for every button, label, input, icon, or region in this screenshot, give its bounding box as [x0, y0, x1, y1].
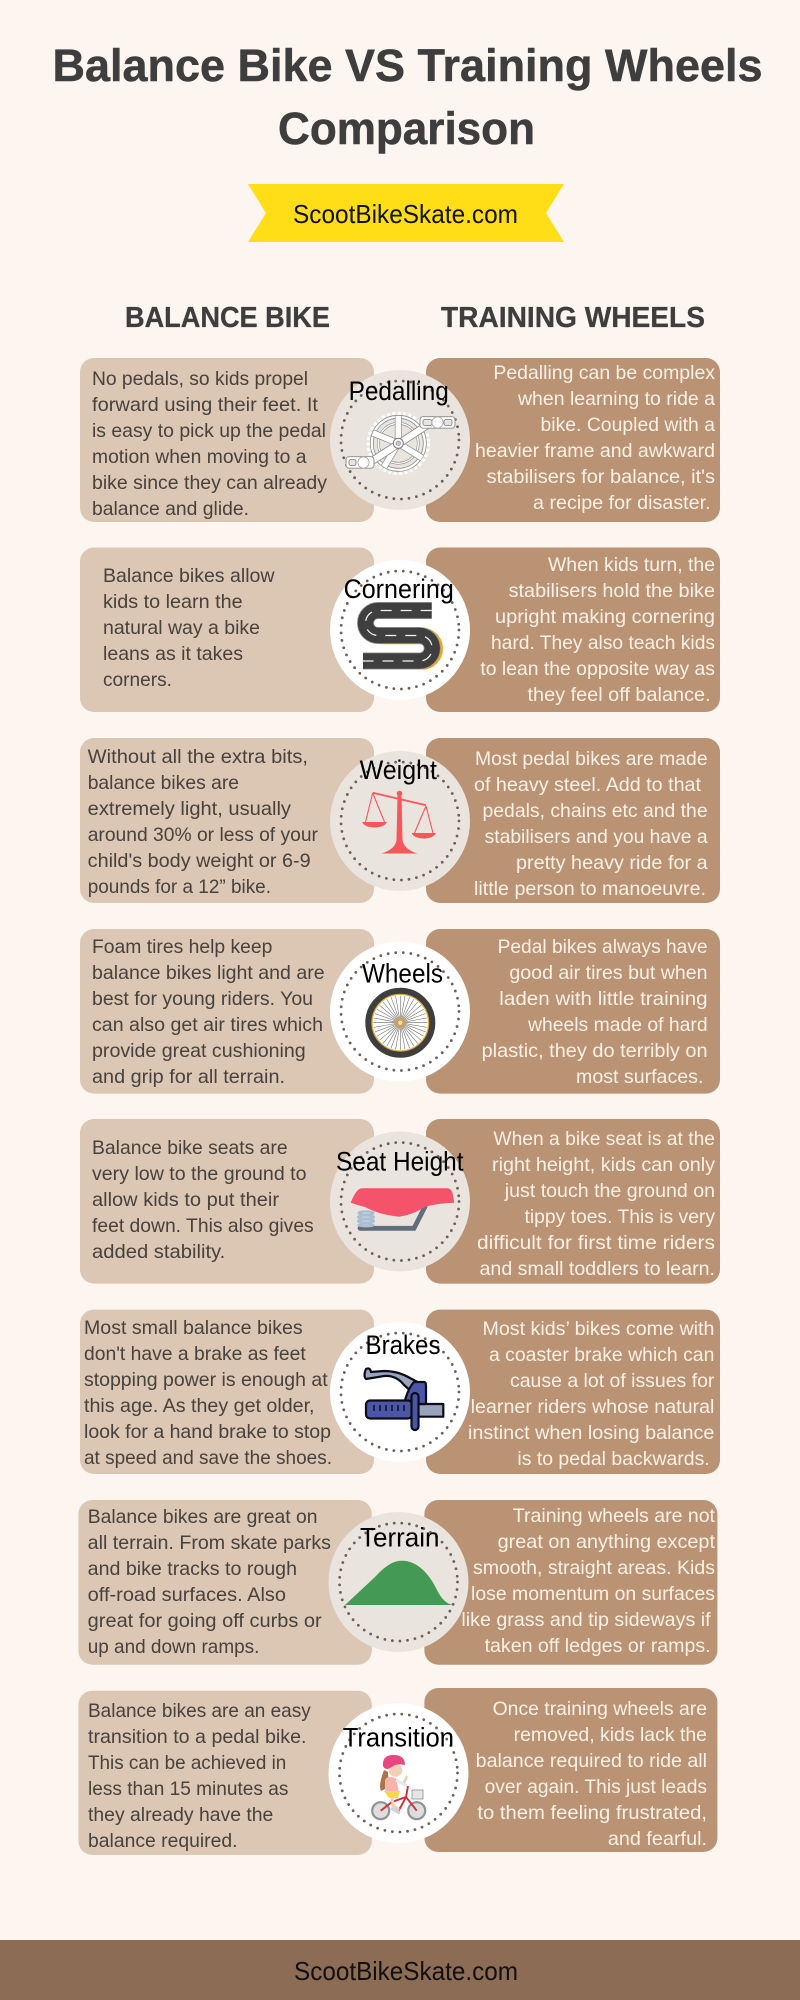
panel: balance bike weight: balance bikes are: [88, 772, 239, 794]
panel: training wheels brakes: Most kids’ bikes come with: [482, 1318, 714, 1340]
panel: training wheels terrain: smooth, straight areas. Kids: [473, 1557, 715, 1579]
badge: weight circle: [330, 751, 470, 891]
panel: balance bike wheels: Foam tires help keep: [92, 936, 273, 958]
panel: balance bike transition: Balance bikes are an easy: [88, 1700, 311, 1722]
icon: balance scales: [362, 791, 436, 854]
panel: training wheels transition: removed, kids lack the: [514, 1724, 707, 1746]
panel: balance bike weight: around 30% or less of your: [88, 824, 318, 846]
panel: balance bike brakes: [80, 1310, 374, 1474]
icon: brake lever and grip: [364, 1368, 443, 1430]
panel: balance bike transition: This can be achieved in: [88, 1752, 286, 1774]
badge: cornering circle: [330, 560, 470, 700]
panel: training wheels brakes: instinct when losing balance: [468, 1422, 714, 1444]
panel: training wheels cornering: they feel off balance.: [528, 684, 711, 706]
icon: child riding bike: [372, 1755, 425, 1819]
panel: training wheels transition: and fearful.: [608, 1828, 707, 1850]
heading: training wheels column: TRAINING WHEELS: [441, 302, 705, 334]
row: Transition: [78, 1688, 717, 1855]
panel: training wheels cornering: hard. They also teach kids: [491, 632, 715, 654]
panel: balance bike cornering: corners.: [103, 669, 172, 691]
panel: balance bike terrain: up and down ramps.: [88, 1636, 259, 1658]
title: Comparison: [278, 103, 535, 154]
panel: balance bike transition: balance required.: [88, 1830, 238, 1852]
panel: training wheels transition: Once training wheels are: [493, 1698, 707, 1720]
panel: training wheels seat height: tippy toes. This is very: [524, 1206, 715, 1228]
panel: training wheels pedalling: a recipe for disaster.: [533, 492, 711, 514]
footer bar: ScootBikeSkate.com: [294, 1956, 518, 1986]
panel: balance bike pedalling: bike since they can already: [92, 472, 327, 494]
label: Transition: Transition: [343, 1722, 454, 1752]
panel: balance bike pedalling: forward using their feet. It: [92, 394, 319, 416]
panel: training wheels weight: pretty heavy ride for a: [516, 852, 708, 874]
panel: balance bike terrain: Balance bikes are great on: [88, 1506, 318, 1528]
panel: training wheels terrain: Training wheels are not: [513, 1505, 716, 1527]
panel: training wheels weight: little person to manoeuvre.: [474, 878, 706, 900]
label: Wheels: Wheels: [362, 959, 443, 989]
panel: training wheels wheels: Pedal bikes always have: [498, 936, 708, 958]
badge: brakes circle: [330, 1322, 470, 1462]
row: Weight: [80, 738, 720, 903]
panel: training wheels seat height: and small toddlers to learn.: [480, 1258, 715, 1280]
panel: balance bike seat height: [80, 1119, 374, 1284]
panel: training wheels brakes: learner riders whose natural: [471, 1396, 714, 1418]
title: Balance Bike VS Training Wheels: [52, 40, 762, 91]
label: Pedalling: Pedalling: [349, 376, 449, 406]
row: Terrain: [78, 1500, 717, 1665]
panel: training wheels wheels: good air tires but when: [509, 962, 708, 984]
panel: training wheels seat height: just touch the ground on: [504, 1180, 715, 1202]
panel: balance bike brakes: Most small balance bikes: [84, 1317, 303, 1339]
panel: balance bike cornering: leans as it takes: [103, 643, 243, 665]
panel: training wheels terrain: [424, 1500, 717, 1665]
panel: training wheels seat height: right height, kids can only: [492, 1154, 715, 1176]
panel: balance bike seat height: very low to the ground to: [92, 1163, 307, 1185]
panel: balance bike cornering: natural way a bike: [103, 617, 260, 639]
label: Seat Height: Seat Height: [336, 1147, 464, 1177]
panel: training wheels cornering: to lean the opposite way as: [480, 658, 715, 680]
panel: training wheels wheels: [426, 929, 720, 1094]
panel: balance bike terrain: off-road surfaces. Also: [88, 1584, 286, 1606]
panel: balance bike cornering: kids to learn the: [103, 591, 243, 613]
panel: balance bike brakes: look for a hand brake to stop: [84, 1421, 331, 1443]
panel: balance bike weight: Without all the extra bits,: [88, 746, 308, 768]
panel: training wheels weight: of heavy steel. Add to that: [474, 774, 702, 796]
panel: balance bike seat height: Balance bike seats are: [92, 1137, 288, 1159]
panel: training wheels wheels: wheels made of hard: [527, 1014, 708, 1036]
panel: training wheels cornering: upright making cornering: [495, 606, 715, 628]
panel: balance bike transition: they already have the: [88, 1804, 273, 1826]
title: [52, 40, 762, 154]
panel: balance bike brakes: this age. As they get older,: [84, 1395, 314, 1417]
panel: training wheels seat height: When a bike seat is at the: [493, 1128, 715, 1150]
panel: balance bike transition: [78, 1691, 372, 1855]
row: Wheels: [80, 929, 720, 1094]
row: Pedalling: [80, 358, 720, 522]
badge: transition circle: [328, 1703, 468, 1843]
panel: training wheels seat height: difficult for first time riders: [477, 1232, 715, 1254]
label: Brakes: Brakes: [366, 1330, 440, 1360]
panel: balance bike cornering: Balance bikes allow: [103, 565, 275, 587]
panel: training wheels brakes: is to pedal backwards.: [517, 1448, 710, 1470]
panel: training wheels pedalling: stabilisers for balance, it's: [487, 466, 715, 488]
label: Terrain: Terrain: [360, 1523, 440, 1553]
panel: balance bike pedalling: is easy to pick up the pedal: [92, 420, 326, 442]
panel: balance bike terrain: [78, 1500, 372, 1665]
footer bar: [0, 1940, 800, 2000]
panel: training wheels pedalling: heavier frame and awkward: [475, 440, 715, 462]
panel: balance bike terrain: all terrain. From skate parks: [88, 1532, 331, 1554]
panel: training wheels pedalling: when learning to ride a: [517, 388, 715, 410]
badge: wheels circle: [330, 942, 470, 1082]
panel: balance bike pedalling: motion when moving to a: [92, 446, 307, 468]
panel: balance bike transition: transition to a pedal bike.: [88, 1726, 306, 1748]
panel: training wheels brakes: [426, 1310, 720, 1474]
panel: balance bike wheels: provide great cushioning: [92, 1040, 306, 1062]
panel: balance bike weight: extremely light, usually: [88, 798, 291, 820]
badge: pedalling circle: [330, 370, 470, 510]
panel: balance bike seat height: allow kids to put their: [92, 1189, 280, 1211]
panel: training wheels pedalling: [426, 358, 720, 522]
panel: training wheels transition: balance required to ride all: [476, 1750, 707, 1772]
panel: training wheels transition: over again. This just leads: [485, 1776, 707, 1798]
banner: site name ribbon: ScootBikeSkate.com: [293, 199, 518, 229]
panel: balance bike terrain: and bike tracks to rough: [88, 1558, 297, 1580]
panel: balance bike brakes: don't have a brake as feet: [84, 1343, 306, 1365]
panel: training wheels brakes: a coaster brake which can: [489, 1344, 714, 1366]
panel: training wheels pedalling: bike. Coupled with a: [540, 414, 715, 436]
panel: training wheels transition: to them feeling frustrated,: [477, 1802, 707, 1824]
icon: winding road: [363, 610, 435, 662]
panel: training wheels terrain: lose momentum on surfaces: [471, 1583, 715, 1605]
panel: balance bike cornering: [80, 548, 374, 712]
panel: balance bike weight: pounds for a 12” bike.: [88, 876, 271, 898]
panel: balance bike seat height: added stability.: [92, 1241, 225, 1263]
panel: training wheels weight: stabilisers and you have a: [485, 826, 708, 848]
icon: green hill: [345, 1561, 453, 1605]
panel: balance bike weight: [80, 738, 374, 903]
panel: training wheels brakes: cause a lot of issues for: [510, 1370, 715, 1392]
label: Cornering: Cornering: [344, 574, 454, 604]
label: Weight: Weight: [360, 755, 438, 785]
badge: terrain circle: [328, 1512, 468, 1652]
panel: training wheels weight: [426, 738, 720, 903]
panel: training wheels wheels: plastic, they do terribly on: [482, 1040, 708, 1062]
panel: training wheels terrain: taken off ledges or ramps.: [485, 1635, 711, 1657]
panel: balance bike terrain: great for going off curbs or: [88, 1610, 322, 1632]
panel: training wheels wheels: laden with little training: [499, 988, 708, 1010]
panel: balance bike wheels: best for young riders. You: [92, 988, 313, 1010]
panel: training wheels seat height: [426, 1119, 720, 1284]
panel: training wheels transition: [424, 1688, 717, 1852]
panel: training wheels weight: pedals, chains etc and the: [482, 800, 708, 822]
panel: balance bike brakes: at speed and save the shoes.: [84, 1447, 332, 1469]
panel: balance bike wheels: [80, 929, 374, 1094]
panel: balance bike wheels: can also get air tires which: [92, 1014, 323, 1036]
panel: training wheels cornering: When kids turn, the: [548, 554, 715, 576]
panel: balance bike wheels: and grip for all terrain.: [92, 1066, 285, 1088]
panel: balance bike brakes: stopping power is enough at: [84, 1369, 328, 1391]
panel: balance bike pedalling: balance and glide.: [92, 498, 249, 520]
panel: training wheels cornering: [426, 548, 720, 712]
badge: seat height circle: [330, 1132, 470, 1272]
panel: training wheels terrain: like grass and tip sideways if: [461, 1609, 711, 1631]
panel: balance bike pedalling: No pedals, so kids propel: [92, 368, 308, 390]
row: Seat Height: [80, 1119, 720, 1284]
panel: training wheels cornering: stabilisers hold the bike: [509, 580, 715, 602]
row: Cornering: [80, 548, 720, 712]
icon: spoked wheel: [369, 991, 432, 1054]
heading: balance bike column: BALANCE BIKE: [125, 302, 330, 334]
icon: bike saddle: [351, 1188, 454, 1228]
panel: balance bike weight: child's body weight or 6-9: [88, 850, 311, 872]
panel: training wheels pedalling: Pedalling can be complex: [493, 362, 715, 384]
banner: site name ribbon: [248, 184, 564, 242]
panel: training wheels wheels: most surfaces.: [576, 1066, 703, 1088]
panel: training wheels terrain: great on anything except: [498, 1531, 716, 1553]
icon: crankset: [346, 413, 455, 473]
panel: balance bike seat height: feet down. This also gives: [92, 1215, 314, 1237]
panel: balance bike transition: less than 15 minutes as: [88, 1778, 289, 1800]
panel: balance bike pedalling: [80, 358, 374, 522]
panel: training wheels weight: Most pedal bikes are made: [475, 748, 708, 770]
row: Brakes: [80, 1310, 720, 1474]
panel: balance bike wheels: balance bikes light and are: [92, 962, 325, 984]
